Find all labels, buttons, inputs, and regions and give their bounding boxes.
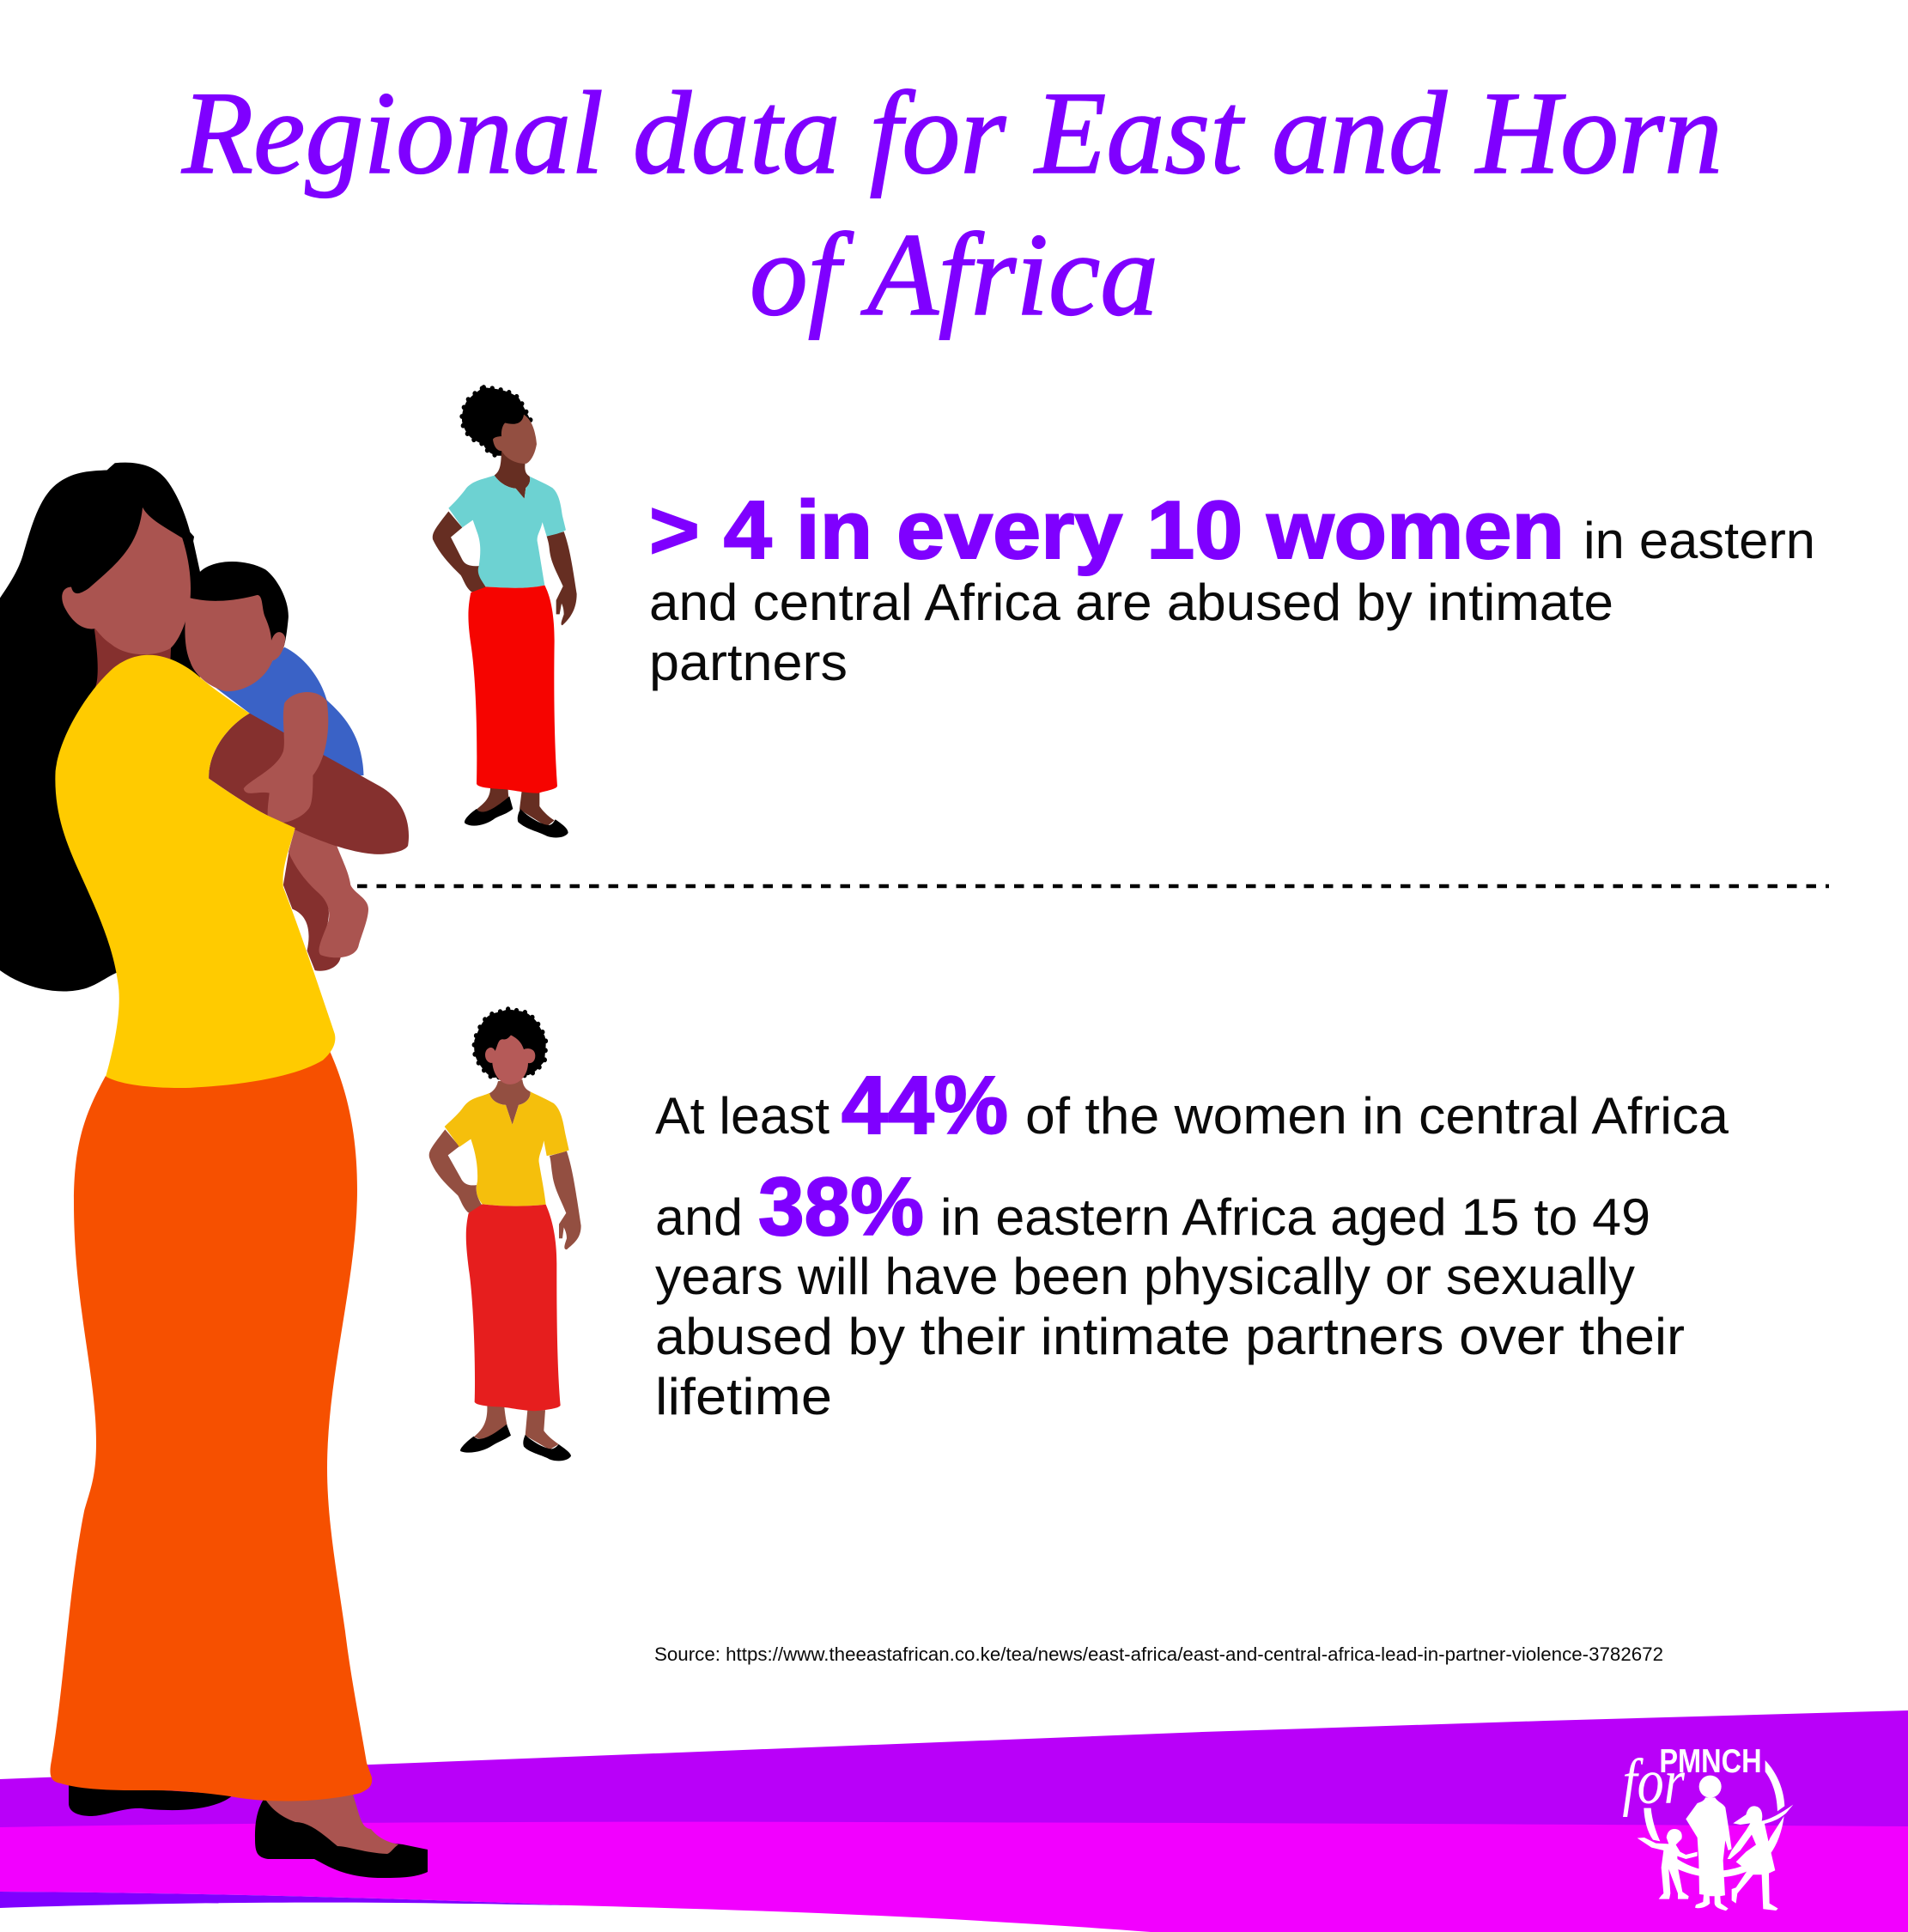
baby's shirt (216, 647, 363, 780)
arms (433, 511, 577, 625)
skirt (468, 586, 557, 793)
face (485, 1036, 535, 1084)
shoes (460, 1425, 571, 1461)
logo ring (1644, 1760, 1784, 1878)
text block: 44% and 38%: in eastern Africa aged 15 to 49 (940, 1188, 1650, 1246)
mother's shoes and leg (69, 1784, 428, 1878)
ground bands (0, 1710, 1908, 1932)
text block: 4 in every 10 women: in eastern (1583, 512, 1815, 569)
mother's arm (209, 714, 409, 854)
text block: 44% and 38%: of the women in central Africa (1025, 1087, 1729, 1145)
illustration: woman in teal shirt (433, 387, 577, 837)
baby's legs (283, 828, 368, 971)
text block: 44% and 38%: abused by their intimate partners over their (655, 1308, 1685, 1365)
text block: 4 in every 10 women: partners (649, 634, 848, 691)
mother's skirt (50, 1051, 372, 1801)
mother's face (62, 507, 191, 654)
hair (462, 387, 531, 456)
mother's hair (0, 463, 200, 992)
text block: 44% and 38%: lifetime (655, 1368, 832, 1425)
title: Regional data for East and Horn (181, 67, 1723, 198)
logo wordmark: PMNCH (1659, 1742, 1762, 1780)
logo mother (1686, 1776, 1732, 1911)
shoes (465, 796, 568, 837)
legs (477, 786, 555, 827)
text block: 4 in every 10 women: and central Africa are abused by intimate (649, 574, 1613, 631)
text block: 44% and 38%: and (655, 1188, 743, 1246)
text block: 44% and 38%: years will have been physically or sexually (655, 1248, 1635, 1305)
text block: 44% and 38%: 38% (758, 1161, 924, 1253)
hair (474, 1009, 546, 1078)
text block: 4 in every 10 women (649, 484, 1815, 691)
neck (495, 451, 530, 499)
mother's shirt (55, 655, 335, 1088)
text block: 44% and 38%: At least (655, 1087, 829, 1145)
text block: 4 in every 10 women: > 4 in every 10 women (649, 484, 1565, 576)
text block: 44% and 38% (655, 1060, 1729, 1425)
illustration: woman in yellow shirt (429, 1009, 581, 1461)
legs (474, 1406, 559, 1449)
source note: Source: https://www.theeastafrican.co.ke/tea/news/east-africa/east-and-central-africa-lead-in-partner-violence-3782672 (654, 1643, 1663, 1665)
skirt (466, 1204, 561, 1411)
logo wordmark: for (1622, 1747, 1686, 1818)
illustration: mother holding baby (0, 463, 428, 1878)
neck (489, 1079, 531, 1125)
logo boy (1638, 1829, 1698, 1899)
logo: PMNCH for women and children (1622, 1742, 1793, 1911)
baby's arm (244, 692, 328, 823)
face (493, 415, 537, 464)
shirt (448, 476, 566, 588)
divider line (357, 884, 1829, 888)
logo wordmark (1622, 1742, 1762, 1818)
mother's neck (94, 629, 171, 688)
title: of Africa (750, 209, 1158, 340)
logo girl (1728, 1805, 1793, 1911)
title (181, 67, 1723, 340)
shirt (445, 1091, 569, 1206)
baby's face (185, 595, 285, 691)
text block: 44% and 38%: 44% (842, 1060, 1008, 1151)
baby's hair (190, 562, 289, 648)
arms (429, 1129, 581, 1249)
